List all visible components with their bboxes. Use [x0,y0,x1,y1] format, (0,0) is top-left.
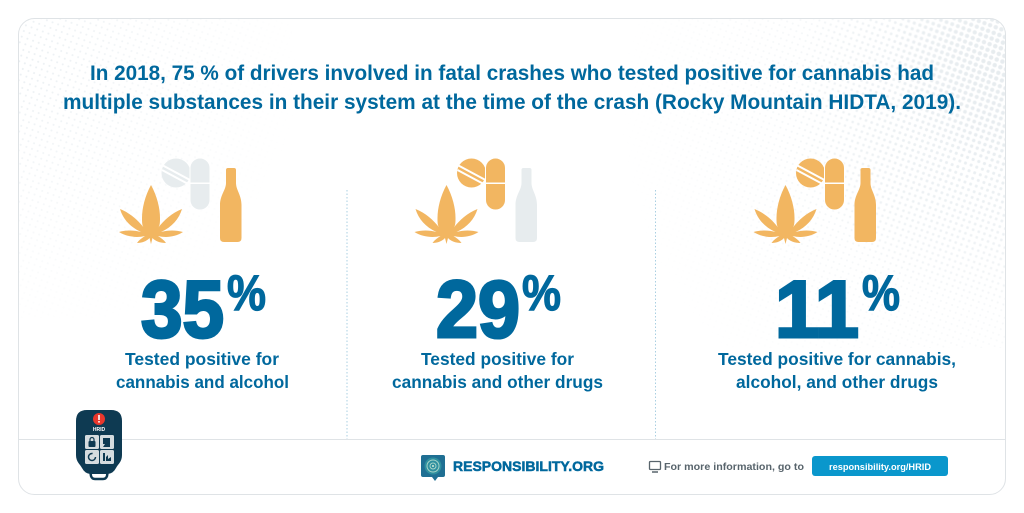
text: cannabis and other drugs [392,349,603,392]
text: cannabis and alcohol [116,349,289,392]
title: multiple substances in their system at the time of the crash (Rocky Mountain HIDTA, 2019). [63,90,961,114]
text: cannabis and other drugs: Tested positive for [421,349,574,369]
text: cannabis and alcohol: cannabis and alcohol [116,372,289,392]
text: cannabis and alcohol: Tested positive for [125,349,279,369]
button: responsibility.org/HRID: responsibility.org/HRID [829,462,931,473]
text: cannabis, alcohol, and other drugs: Tested positive for cannabis, [718,349,956,369]
text: cannabis, alcohol, and other drugs [718,349,956,392]
stat: 35 percent: 35 [141,265,224,355]
stat: 29 percent: 29 [436,265,520,355]
icon: cannabis, gray pills, alcohol bottle [119,158,242,244]
text: for more information: For more information, go to [664,461,804,473]
button: responsibility.org/HRID [812,456,948,476]
stat: 11 percent [775,265,900,355]
icon: cannabis, pills, bottle [754,158,876,244]
title [63,61,961,114]
logo: Responsibility.org [421,455,604,481]
logo: Responsibility.org: RESPONSIBILITY.ORG [453,458,604,474]
stat: 11 percent: % [862,265,900,321]
icon: cannabis, pills, gray bottle [414,158,537,244]
text: cannabis and other drugs: cannabis and other drugs [392,372,603,392]
icon: monitor [650,462,660,472]
stat: 35 percent: % [227,265,266,321]
stat: 11 percent: 11 [775,265,859,355]
icon: HRID key fob: HRID [93,427,105,433]
title: In 2018, 75 % of drivers involved in fatal crashes who tested positive for cannabis had [90,61,934,85]
stat: 29 percent: % [522,265,561,321]
icon: HRID key fob [76,410,122,479]
text: cannabis, alcohol, and other drugs: alcohol, and other drugs [736,372,938,392]
